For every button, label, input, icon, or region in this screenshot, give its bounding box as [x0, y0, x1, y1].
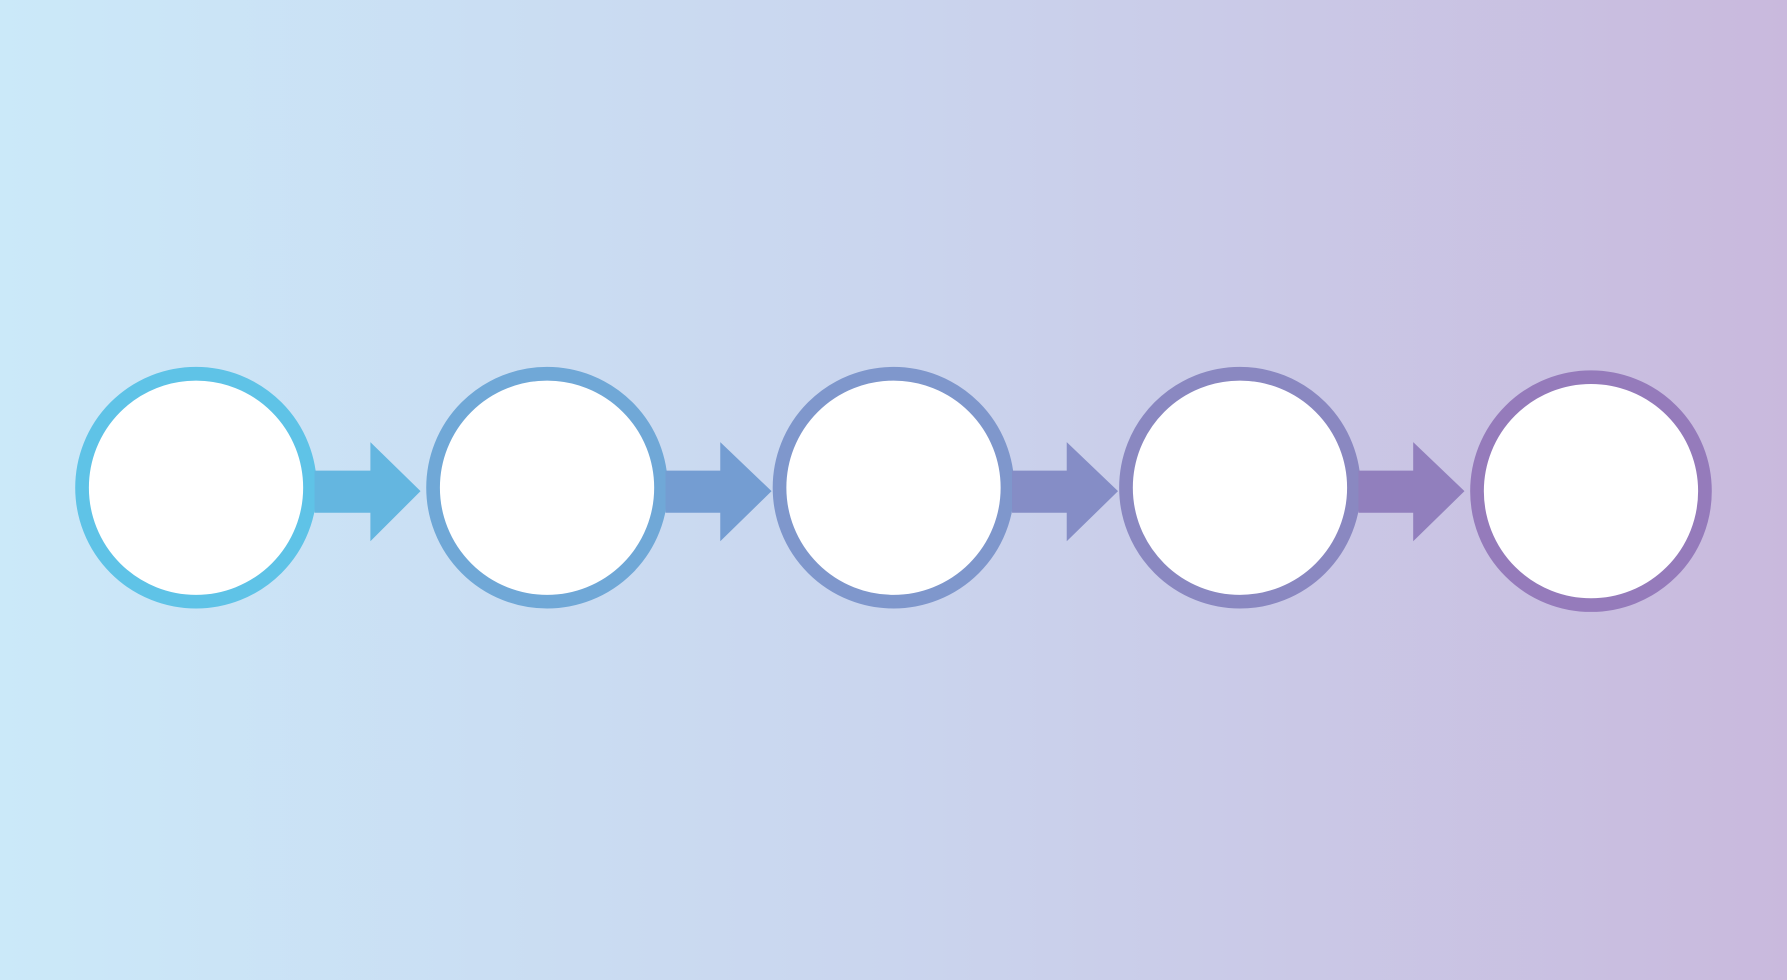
arrow 4: [1358, 442, 1464, 541]
arrow 2: [666, 442, 772, 541]
arrow 1: [315, 442, 421, 541]
step 2 circle: [433, 374, 661, 602]
step 5 circle: [1477, 377, 1705, 605]
step 1 circle: [82, 374, 310, 602]
step 4 circle: [1126, 374, 1354, 602]
step 3 circle: [780, 374, 1007, 602]
arrow 3: [1012, 442, 1118, 541]
